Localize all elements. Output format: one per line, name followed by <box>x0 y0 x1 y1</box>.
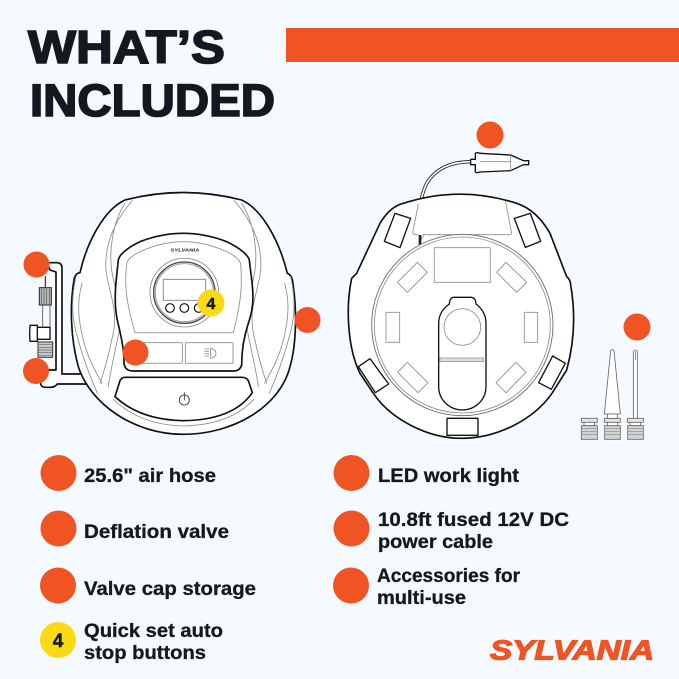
digital display dial <box>150 258 219 327</box>
back view of inflator <box>348 153 574 438</box>
body strap contour lines <box>73 201 294 393</box>
inflation needle <box>627 350 643 439</box>
power button panel <box>113 377 254 426</box>
redraw of cable end over rim <box>416 235 424 245</box>
legend item: accessories: multi-use <box>377 587 466 609</box>
marker: auto stop buttons: 4 <box>207 296 216 313</box>
marker: power cable <box>476 122 504 148</box>
front view of inflator <box>30 192 296 434</box>
central pill compartment <box>439 297 486 410</box>
legend item: power cable <box>334 509 569 553</box>
tapered nozzle <box>604 350 620 439</box>
title: WHAT’S <box>28 21 225 73</box>
legend item: quick set buttons: Quick set auto <box>84 620 223 642</box>
SYLVANIA mini logo: SYLVANIA <box>170 247 200 252</box>
recessed top compartment <box>413 202 511 242</box>
legend item: power cable: power cable <box>378 531 493 553</box>
legend item: deflation valve <box>40 510 229 546</box>
legend item: valve cap storage: Valve cap storage <box>84 578 256 600</box>
circular back plate <box>372 234 553 416</box>
legend item: quick set buttons <box>40 620 223 664</box>
compressor body outline <box>71 192 296 434</box>
legend item: quick set buttons: 4 <box>53 631 64 652</box>
legend item: quick set buttons: stop buttons <box>84 642 206 664</box>
marker: deflation valve <box>122 340 148 366</box>
back body outline <box>348 194 574 438</box>
marker: auto stop buttons <box>198 290 224 316</box>
legend item: LED work light <box>334 455 520 491</box>
accessories: needle and nozzles <box>581 350 643 439</box>
title: INCLUDED <box>30 75 275 126</box>
legend item: power cable: 10.8ft fused 12V DC <box>378 509 569 531</box>
orange header banner <box>286 28 679 62</box>
air hose <box>30 263 91 387</box>
title <box>28 21 275 126</box>
legend item: accessories <box>333 565 520 609</box>
SYLVANIA logo: SYLVANIA <box>490 634 654 666</box>
legend item: valve cap storage <box>40 568 256 604</box>
marker: air hose <box>24 252 50 278</box>
marker: LED light <box>294 307 320 333</box>
diagram markers <box>23 122 650 384</box>
control panel <box>115 233 253 371</box>
legend <box>40 455 569 664</box>
power cable and plug <box>419 153 529 245</box>
valve cap adapter <box>581 418 597 439</box>
legend item: accessories: Accessories for <box>377 565 520 587</box>
panel buttons <box>133 343 233 363</box>
legend item: deflation valve: Deflation valve <box>84 521 229 543</box>
legend item: LED work light: LED work light <box>378 465 520 487</box>
marker: accessories <box>624 314 650 340</box>
legend item: air hose <box>40 455 216 491</box>
legend item: air hose: 25.6" air hose <box>84 465 216 487</box>
marker: valve cap <box>23 358 49 384</box>
rim feet <box>358 213 565 435</box>
